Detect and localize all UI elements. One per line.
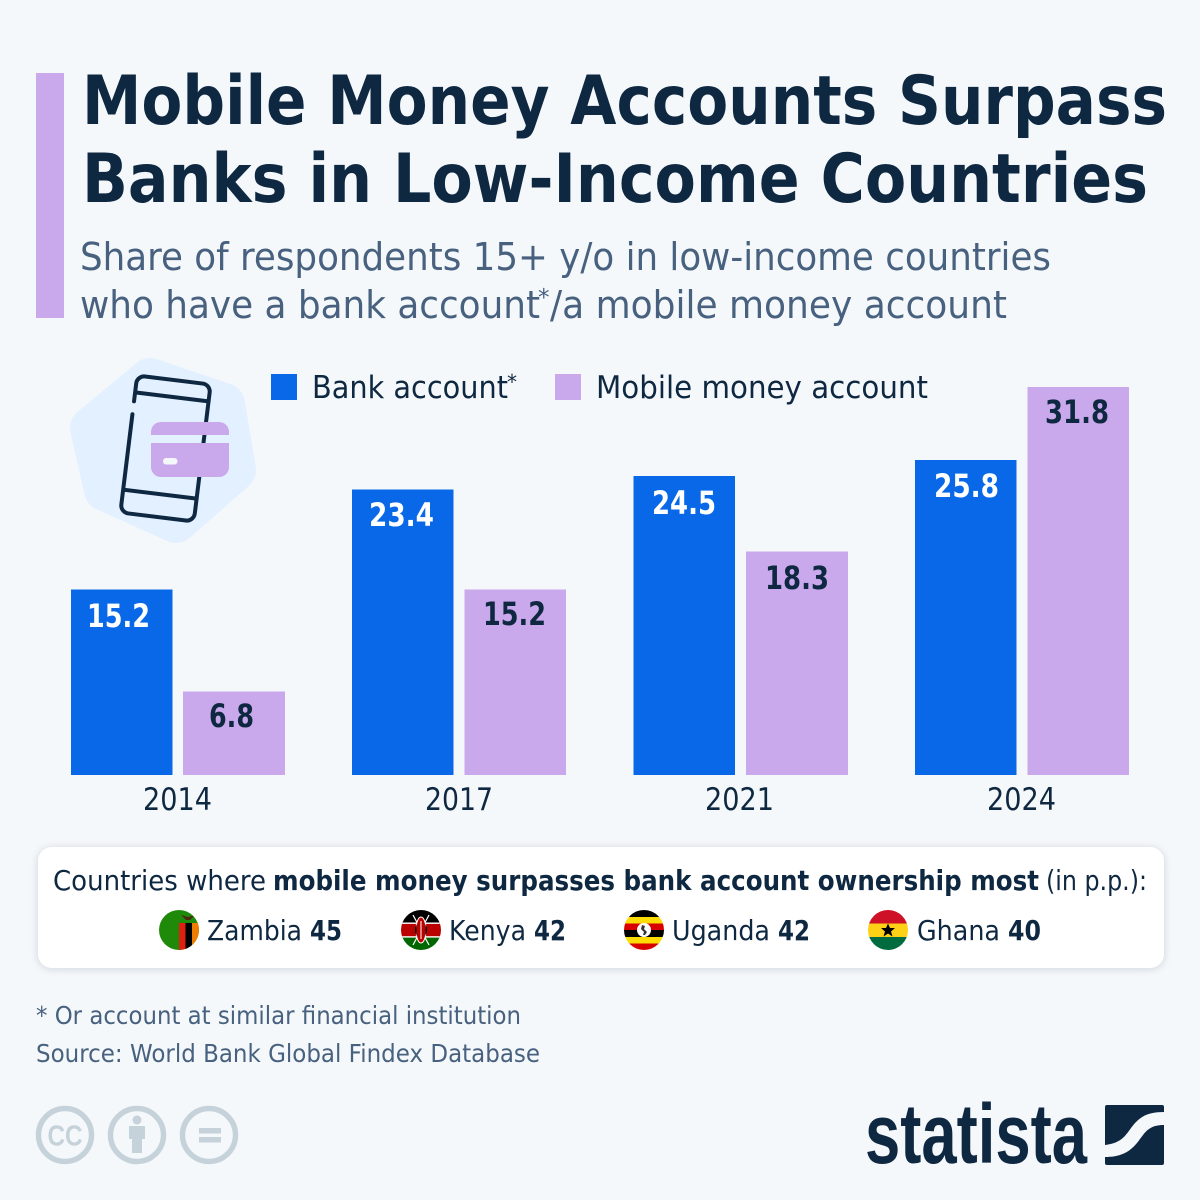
icon background blob — [91, 379, 235, 522]
panel: countries callout — [38, 847, 1164, 968]
logo mark — [1105, 1105, 1164, 1165]
country: Ghana: 40 — [1008, 915, 1041, 947]
country: Kenya: 42 — [534, 915, 566, 947]
country: Zambia: Zambia — [207, 915, 302, 947]
group: 2024 — [915, 387, 1129, 818]
subtitle: /a mobile money account — [550, 283, 1007, 327]
icon: phone with card — [91, 376, 235, 522]
group: 2017: 23.4 — [369, 496, 434, 534]
subtitle: who have a bank account — [80, 283, 540, 327]
legend: mobile money account: Mobile money account — [596, 370, 928, 406]
country: Uganda: 42 — [778, 915, 810, 947]
country: Zambia — [159, 910, 342, 950]
group: 2017: 2017 — [425, 782, 493, 818]
title accent bar — [36, 73, 64, 318]
icon: cc license — [38, 1108, 92, 1162]
group: 2024: 31.8 — [1045, 393, 1109, 431]
bar chart — [71, 387, 1129, 818]
legend: bank account: * — [507, 370, 517, 394]
group: 2014 — [71, 590, 285, 818]
group: 2014: 6.8 — [209, 697, 254, 735]
group: 2014: 15.2 — [87, 597, 150, 635]
country: Kenya: Kenya — [449, 915, 526, 947]
group: 2021: 24.5 — [652, 484, 716, 522]
group: 2017: 15.2 — [483, 595, 546, 633]
country: Ghana: Ghana — [917, 915, 1000, 947]
icon: attribution — [110, 1108, 164, 1162]
footnote and source: * Or account at similar financial institution — [36, 1001, 521, 1030]
group: 2017 — [352, 490, 566, 818]
group: 2021: 18.3 — [765, 559, 829, 597]
subtitle — [80, 235, 1051, 327]
country: Kenya — [401, 910, 566, 950]
callout heading: (in p.p.): — [1046, 865, 1147, 897]
footnote and source: Source: World Bank Global Findex Database — [36, 1039, 540, 1068]
country: Ghana — [868, 910, 1041, 950]
footnote and source — [36, 1001, 540, 1068]
subtitle: Share of respondents 15+ y/o in low-income countries — [80, 235, 1051, 279]
group: 2014: 2014 — [143, 782, 212, 818]
statista logo: statista — [865, 1087, 1088, 1181]
callout heading: Countries where — [53, 865, 266, 897]
country: Uganda — [624, 910, 810, 950]
legend — [271, 370, 928, 406]
legend: bank account: Bank account — [312, 370, 508, 406]
credit card — [151, 422, 229, 477]
phone outline — [120, 376, 211, 521]
callout heading: mobile money surpasses bank account ownership most — [273, 865, 1039, 897]
title — [82, 62, 1167, 219]
group: 2021 — [634, 476, 848, 818]
group: 2024: 2024 — [987, 782, 1056, 818]
subtitle: * — [538, 285, 550, 311]
icon: no derivatives — [182, 1108, 236, 1162]
icon: cc license: CC — [48, 1120, 83, 1152]
country: Uganda: Uganda — [672, 915, 770, 947]
group: 2021: 2021 — [705, 782, 774, 818]
country: Zambia: 45 — [310, 915, 342, 947]
group: 2024: 25.8 — [934, 467, 999, 505]
